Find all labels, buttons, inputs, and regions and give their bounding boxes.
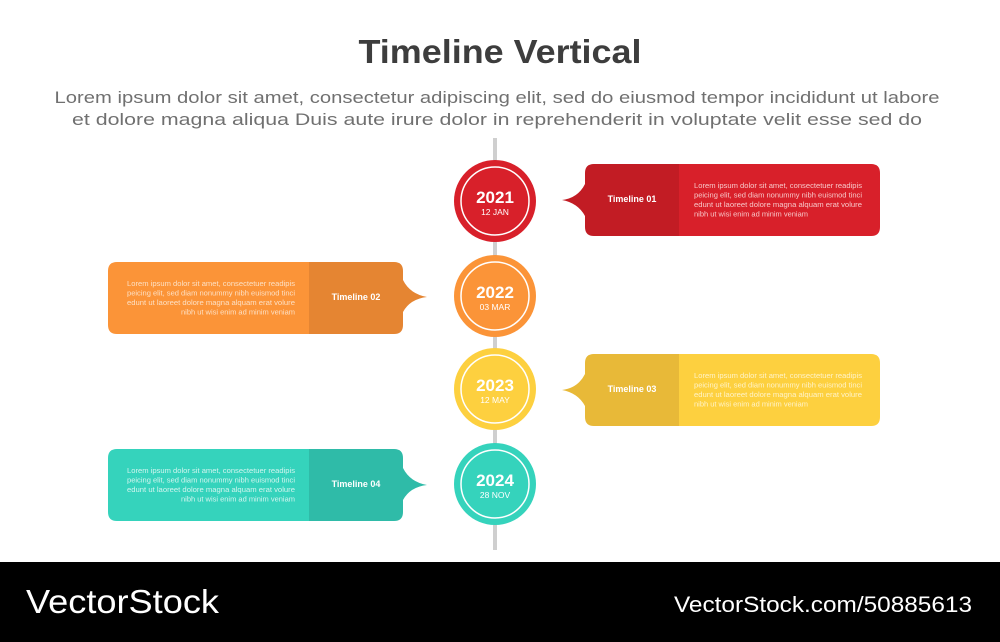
callout: Timeline 01: Lorem ipsum dolor sit amet, consectetuer readipis [694,183,863,190]
timeline axis line [493,138,497,550]
callout: Timeline 01: peicing elit, sed diam nonummy nibh euismod tinci [694,192,862,200]
subtitle: Lorem ipsum dolor sit amet, consectetur adipiscing elit, sed do eiusmod tempor incididunt ut labore [54,88,940,107]
callout: Timeline 04 [108,449,427,521]
callout: Timeline 02: peicing elit, sed diam nonummy nibh euismod tinci [127,290,295,298]
footer bar [0,562,1000,642]
callout: Timeline 03: nibh ut wisi enim ad minim veniam [694,402,808,408]
callout: Timeline 02: Lorem ipsum dolor sit amet, consectetuer readipis [127,281,296,288]
callout: Timeline 03: peicing elit, sed diam nonummy nibh euismod tinci [694,382,862,390]
callout: Timeline 02: nibh ut wisi enim ad minim veniam [181,310,295,316]
circle 2022: 03 MAR [480,302,510,312]
callout: Timeline 04: edunt ut laoreet dolore magna alquam erat volure [127,487,295,494]
circle 2021 [454,160,536,242]
callout: Timeline 04: peicing elit, sed diam nonummy nibh euismod tinci [127,478,295,484]
callout: Timeline 02 [108,262,427,334]
footer bar: VectorStock [26,583,220,620]
circle 2024 [454,443,536,525]
milestone 2: 2022 [108,255,536,337]
callout: Timeline 03: Lorem ipsum dolor sit amet, consectetuer readipis [694,373,863,380]
title: Timeline Vertical [358,33,642,70]
callout: Timeline 03: edunt ut laoreet dolore magna alquam erat volure [694,392,862,399]
circle 2021: 2021 [476,188,514,207]
circle 2023: 12 MAY [480,395,510,405]
subtitle: et dolore magna aliqua Duis aute irure dolor in reprehenderit in voluptate velit esse sed do [72,110,922,129]
milestone 4: 2024 [108,443,536,525]
callout: Timeline 01: Timeline 01 [608,194,656,204]
circle 2022: 2022 [476,283,514,302]
callout: Timeline 01: edunt ut laoreet dolore magna alquam erat volure [694,202,862,209]
callout: Timeline 03 [562,354,880,426]
callout: Timeline 04: nibh ut wisi enim ad minim veniam [181,496,295,504]
circle 2024: 28 NOV [480,490,510,500]
footer bar: VectorStock.com/50885613 [674,592,972,617]
callout: Timeline 01: nibh ut wisi enim ad minim veniam [694,212,808,218]
circle 2022 [454,255,536,337]
callout: Timeline 04: Timeline 04 [332,479,380,489]
callout: Timeline 04: Lorem ipsum dolor sit amet, consectetuer readipis [127,468,296,475]
circle 2023: 2023 [476,376,514,395]
callout: Timeline 02: Timeline 02 [332,292,380,302]
milestone 1: 2021 [454,160,880,242]
callout: Timeline 02: edunt ut laoreet dolore magna alquam erat volure [127,300,295,307]
callout: Timeline 01 [562,164,880,236]
circle 2021: 12 JAN [481,207,509,217]
milestone 3: 2023 [454,348,880,430]
callout: Timeline 03: Timeline 03 [608,384,656,394]
circle 2023 [454,348,536,430]
circle 2024: 2024 [476,471,514,490]
subtitle [54,88,940,129]
